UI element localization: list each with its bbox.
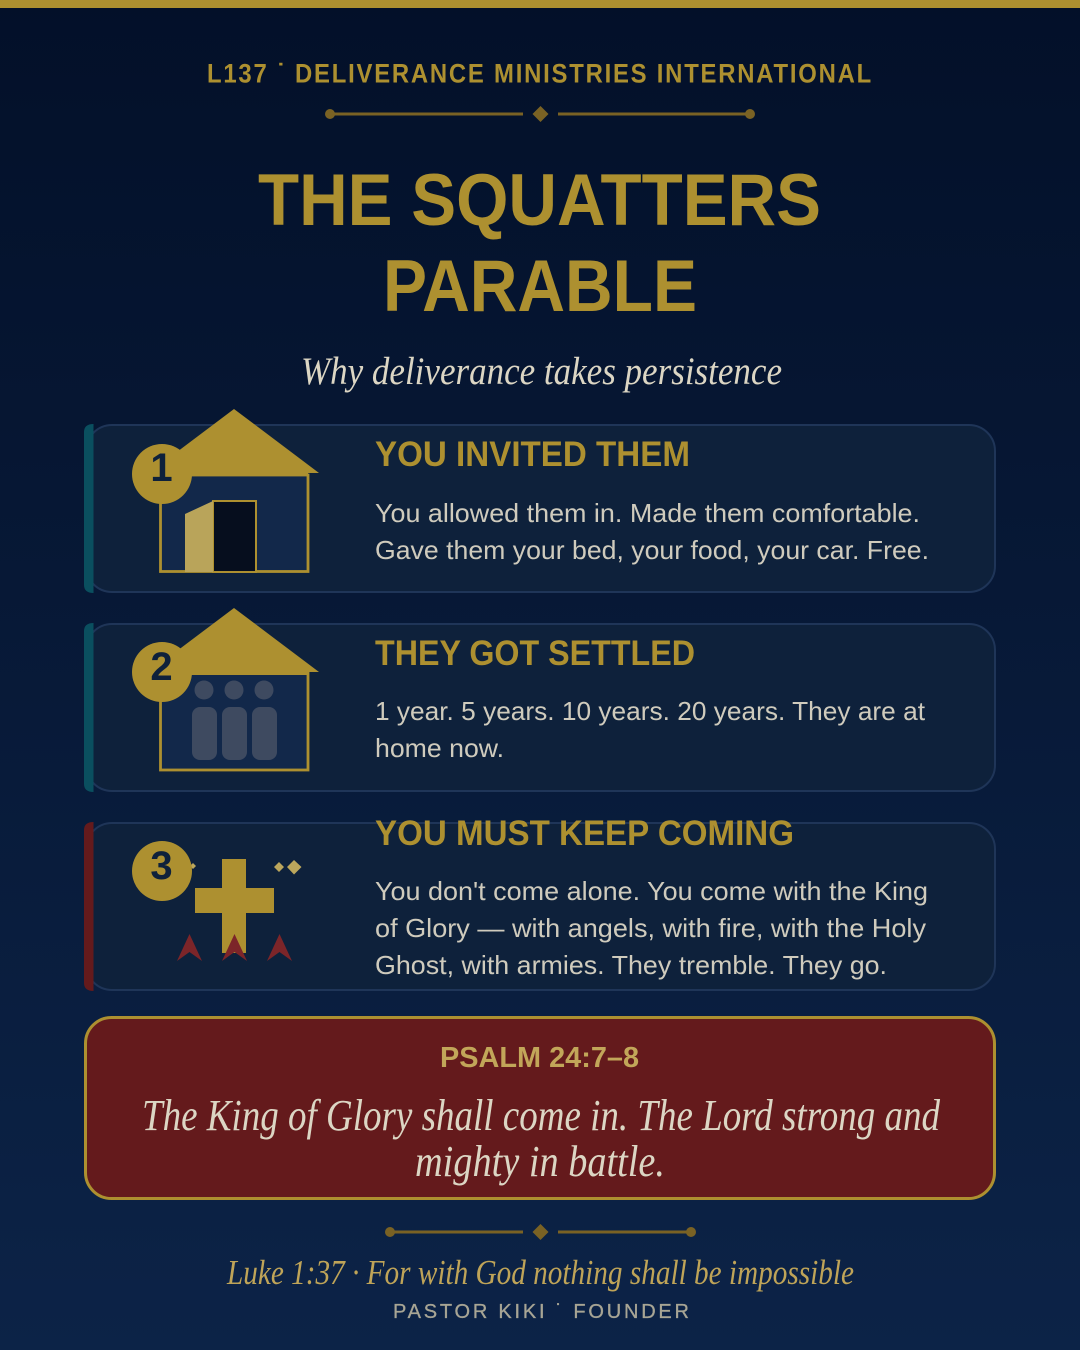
body text: Gave them your bed, your food, your car. Free. (375, 535, 929, 565)
top gold bar (0, 0, 1080, 8)
number badge 3 (132, 841, 192, 901)
number badge 2: 2 (150, 645, 173, 689)
icon: house with occupants (149, 608, 319, 770)
scripture quote (142, 1091, 941, 1186)
panel: step 3 (84, 814, 995, 991)
heading: you invited them: YOU INVITED THEM (375, 435, 690, 474)
top ornament divider (325, 106, 755, 122)
body text (375, 696, 926, 763)
subtitle: Why deliverance takes persistence (301, 350, 782, 393)
body text: Ghost, with armies. They tremble. They go. (375, 950, 887, 980)
number badge 1 (132, 444, 192, 504)
scripture reference: PSALM 24:7–8 (440, 1042, 639, 1074)
scripture quote: The King of Glory shall come in. The Lord strong and (142, 1091, 941, 1140)
panel: step 2 (84, 608, 995, 792)
body text: You don't come alone. You come with the King (375, 876, 928, 906)
number badge 1: 1 (150, 446, 173, 490)
body text: 1 year. 5 years. 10 years. 20 years. They are at (375, 696, 926, 726)
footer verse: Luke 1:37 · For with God nothing shall be impossible (226, 1253, 854, 1292)
heading: they got settled: THEY GOT SETTLED (375, 634, 695, 673)
bottom ornament divider (385, 1224, 696, 1240)
organisation header: L137 ˙ DELIVERANCE MINISTRIES INTERNATIONAL (207, 58, 873, 88)
title: THE SQUATTERS (258, 160, 821, 241)
body text (375, 498, 929, 565)
body text: of Glory — with angels, with fire, with the Holy (375, 913, 926, 943)
heading: you must keep coming: YOU MUST KEEP COMING (375, 814, 794, 853)
footer credit: PASTOR KIKI ˙ FOUNDER (393, 1301, 689, 1323)
scripture quote: mighty in battle. (415, 1137, 665, 1186)
panel: scripture callout (86, 1018, 994, 1198)
title: PARABLE (383, 246, 697, 327)
number badge 3: 3 (150, 844, 173, 888)
body text (375, 876, 928, 980)
panel: step 1 (84, 409, 995, 593)
body text: You allowed them in. Made them comfortable. (375, 498, 920, 528)
body text: home now. (375, 733, 504, 763)
icon: cross with flames and sparkles (177, 859, 302, 961)
icon: house with open door (149, 409, 319, 572)
number badge 2 (132, 642, 192, 702)
title (258, 160, 821, 327)
